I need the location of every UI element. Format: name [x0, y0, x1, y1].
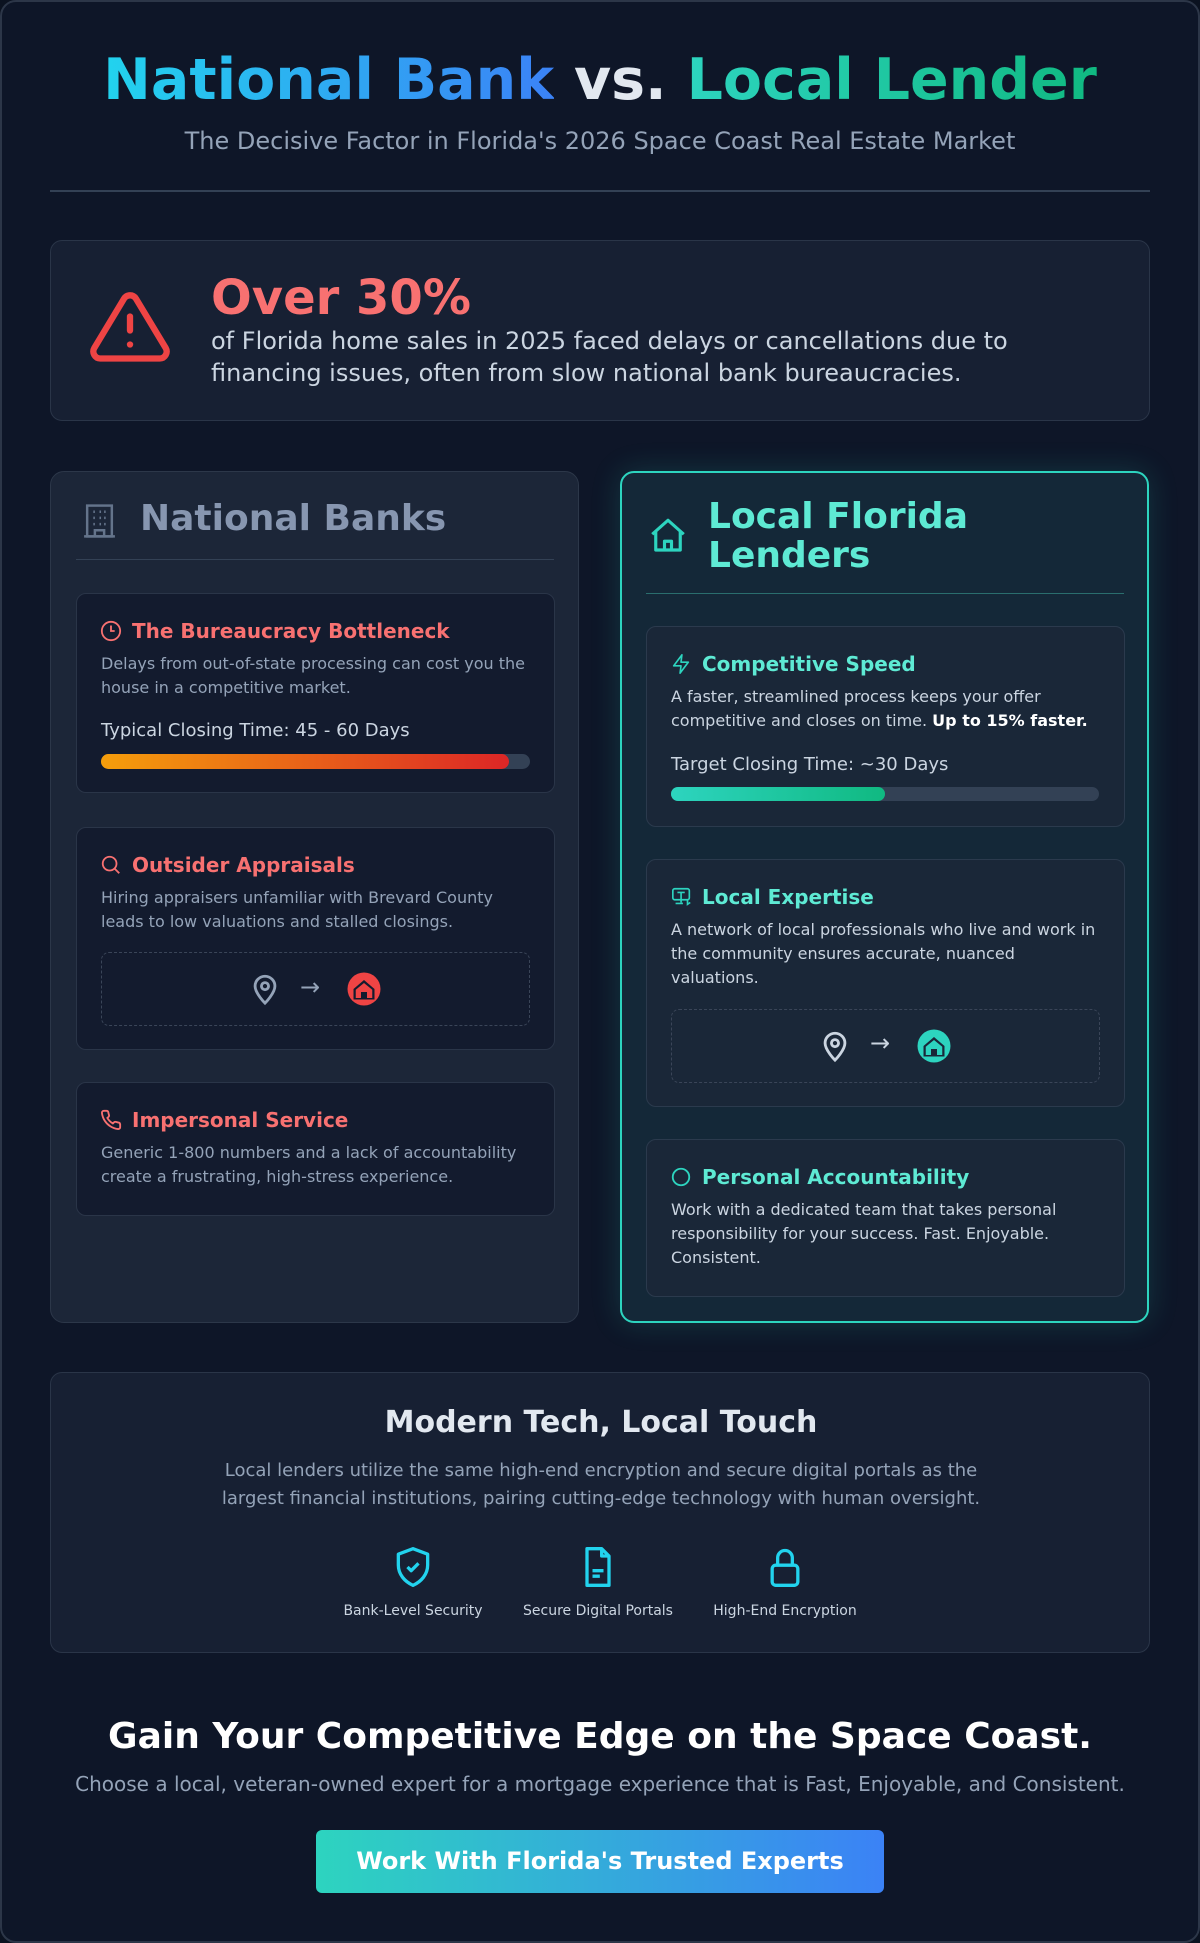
button	[316, 1830, 884, 1893]
subtitle: The Decisive Factor in Florida's 2026 Space Coast Real Estate Market	[185, 127, 1015, 155]
icon: lock	[713, 1548, 857, 1619]
bar chart: target closing	[671, 787, 1099, 801]
card: competitive speed: Target Closing Time: ~30 Days	[671, 754, 948, 775]
title: National Bank vs. Local Lender	[103, 47, 1097, 113]
stat headline: Over 30%	[211, 270, 471, 326]
icon: document: Secure Digital Portals	[523, 1603, 673, 1619]
card: bureaucracy bottleneck: Typical Closing Time: 45 - 60 Days	[101, 720, 410, 741]
heading	[708, 496, 968, 576]
card: impersonal service: Impersonal Service	[132, 1108, 348, 1132]
diagram: pin to teal house	[671, 1009, 1100, 1083]
diagram: pin to red house	[101, 952, 530, 1026]
icon: phone	[101, 1110, 122, 1130]
diagram: pin to red house: →	[300, 973, 320, 1001]
panel: modern tech	[50, 1372, 1150, 1653]
card: local expertise	[646, 859, 1125, 1107]
card: personal accountability	[646, 1139, 1125, 1297]
card: competitive speed: A faster, streamlined process keeps your offer competitive and closes on time. Up to 15% faster.	[671, 687, 1088, 730]
card: impersonal service	[76, 1082, 555, 1216]
card: outsider appraisals	[76, 827, 555, 1050]
heading: Modern Tech, Local Touch	[385, 1405, 817, 1440]
card: bureaucracy bottleneck: The Bureaucracy Bottleneck	[132, 619, 450, 643]
icon: bolt	[672, 654, 690, 674]
card: outsider appraisals: Hiring appraisers unfamiliar with Brevard County leads to low valuations and stalled closings.	[101, 888, 493, 931]
icon: shield	[343, 1547, 483, 1619]
icon: house	[651, 518, 685, 552]
card: competitive speed: Competitive Speed	[702, 652, 916, 676]
stat text: of Florida home sales in 2025 faced delays or cancellations due to financing issues, often from slow national bank bureaucracies.	[211, 327, 1008, 387]
card: local expertise: Local Expertise	[702, 885, 874, 909]
card: local expertise: A network of local professionals who live and work in the community ensures accurate, nuanced valuations.	[671, 920, 1095, 987]
card: bureaucracy bottleneck: Delays from out-of-state processing can cost you the house in a competitive market.	[101, 654, 525, 697]
heading: Lenders	[708, 535, 870, 576]
card: impersonal service: Generic 1-800 numbers and a lack of accountability create a frustrating, high-stress experience.	[101, 1143, 516, 1186]
icon: warning triangle	[90, 292, 170, 362]
card: personal accountability: Work with a dedicated team that takes personal responsibility for your success. Fast. Enjoyable. Consistent.	[671, 1200, 1056, 1267]
button: Work With Florida's Trusted Experts	[356, 1847, 844, 1875]
card: competitive speed	[646, 626, 1125, 827]
icon: search	[102, 856, 120, 874]
bar chart: closing time	[101, 754, 530, 769]
diagram: pin to teal house: →	[870, 1029, 890, 1057]
text: Local lenders utilize the same high-end encryption and secure digital portals as the	[225, 1460, 977, 1481]
text: largest financial institutions, pairing cutting-edge technology with human oversight.	[222, 1488, 980, 1509]
icon: document	[523, 1547, 673, 1619]
icon: circle	[672, 1168, 690, 1186]
icon: lock: High-End Encryption	[713, 1603, 857, 1619]
icon: clock	[100, 620, 122, 642]
cta heading: Gain Your Competitive Edge on the Space Coast.	[108, 1716, 1092, 1757]
text	[222, 1460, 980, 1509]
icon: building	[84, 504, 115, 538]
alert panel	[50, 240, 1150, 421]
icon row	[343, 1547, 857, 1619]
heading: Local Florida	[708, 496, 968, 537]
panel: national banks	[50, 471, 579, 1323]
panel: local florida lenders	[620, 471, 1149, 1323]
icon: network	[672, 888, 691, 906]
icon: shield: Bank-Level Security	[343, 1603, 483, 1619]
card: outsider appraisals: Outsider Appraisals	[132, 853, 355, 877]
cta text: Choose a local, veteran-owned expert for a mortgage experience that is Fast, Enjoyable, and Consistent.	[75, 1772, 1125, 1796]
heading: National Banks	[140, 498, 446, 539]
card: bureaucracy bottleneck	[76, 593, 555, 793]
card: personal accountability: Personal Accountability	[702, 1165, 969, 1189]
